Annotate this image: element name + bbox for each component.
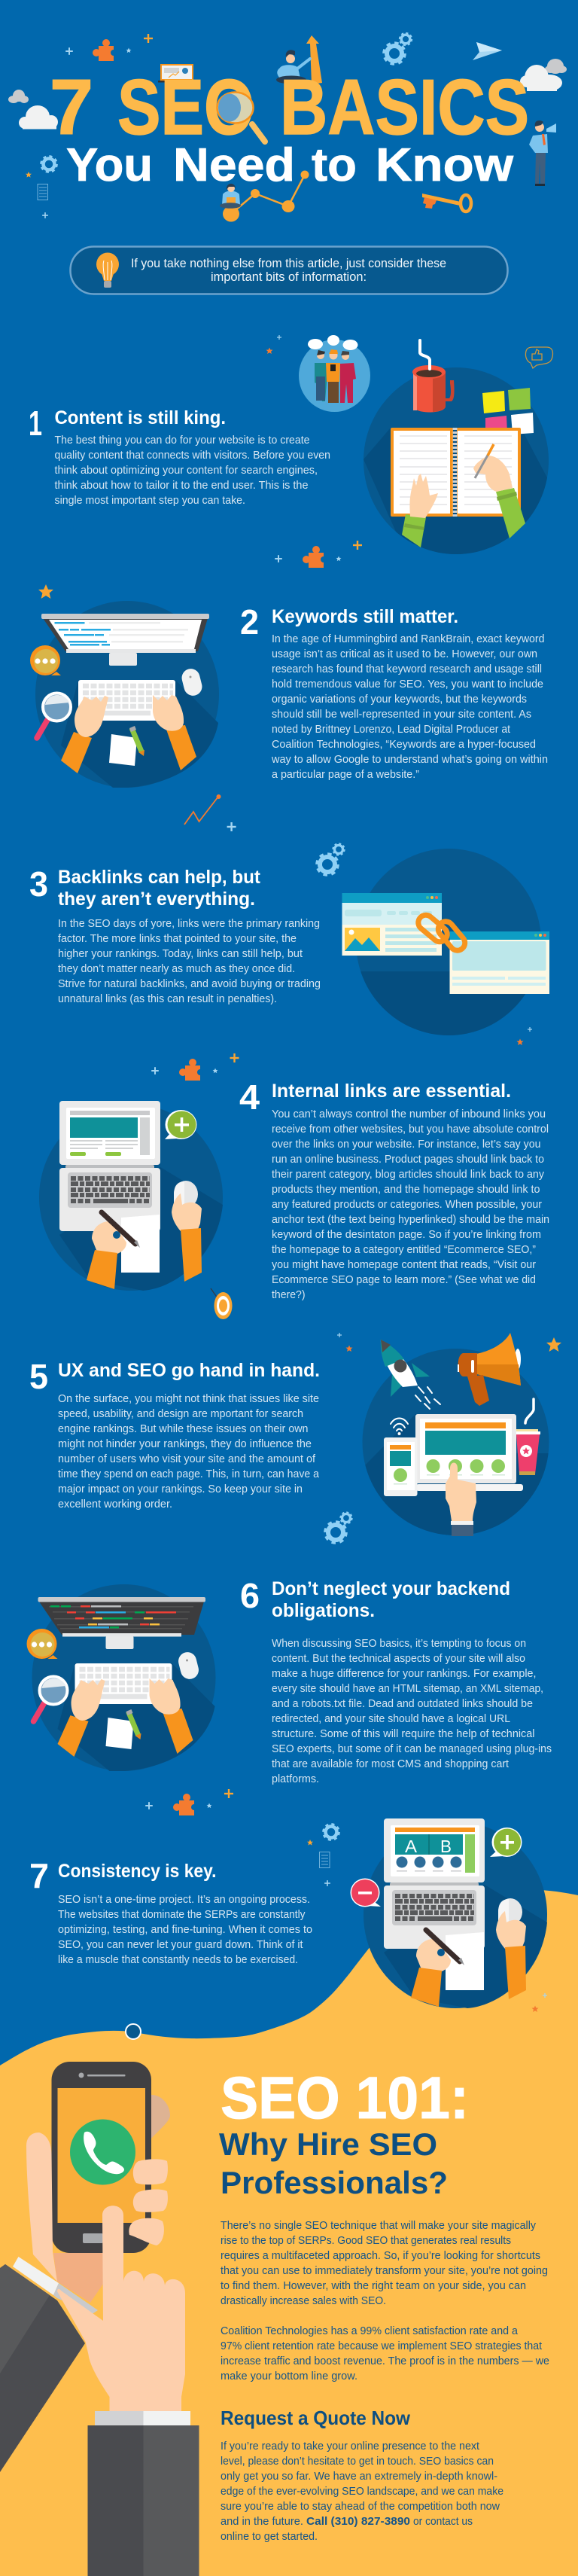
monitor	[415, 1414, 523, 1491]
title line 2	[66, 139, 514, 191]
subheading	[219, 2126, 448, 2200]
body 5: On the surface, you might not think that issues like site	[58, 1392, 319, 1405]
number 7: 7	[29, 1856, 49, 1895]
body 4: run an online business. Product pages should link back to	[272, 1153, 544, 1166]
icon: sparkles	[337, 1333, 561, 1352]
coffee cup	[516, 1399, 540, 1475]
body 3: they don’t matter nearly as much as they once did.	[58, 962, 295, 975]
heading 6	[272, 1578, 510, 1621]
body 1: single most important step you can take.	[54, 494, 245, 507]
heading 3: Backlinks can help, but	[58, 867, 261, 888]
thumb and wrist skin	[26, 2132, 57, 2282]
icon: plus lower left	[42, 212, 48, 218]
body 5: engine rankings. But while these issues on their own	[58, 1422, 309, 1435]
icon: clouds left	[8, 90, 58, 130]
body 6: and a robots.txt file. Dead and outdated links should be	[272, 1697, 533, 1710]
icon: plus and star	[531, 1993, 547, 2012]
illustration: desktop workstation	[30, 601, 219, 788]
writing hand	[473, 444, 525, 538]
shirt cuff	[95, 2411, 190, 2425]
body 4: their parent category, blog articles should link back to any	[272, 1168, 544, 1181]
heading 3: they aren’t everything.	[58, 889, 255, 910]
body: why hire paragraph 2: Coalition Technologies has a 99% client satisfaction rate and a	[221, 2324, 519, 2337]
body 4: You can’t always control the number of inbound links you	[272, 1108, 546, 1120]
body 2: organic variations of your keywords, but the keywords	[272, 693, 527, 706]
A/B screen content	[395, 1828, 475, 1873]
jacket sleeve	[87, 2425, 199, 2576]
heading 7: Consistency is key.	[58, 1861, 217, 1882]
illustration: group of people	[299, 335, 370, 412]
body: why hire paragraph 1: drastically increase sales with SEO.	[221, 2294, 386, 2307]
title line 2: Know	[376, 139, 514, 191]
body 6: that are available for most CMS and shopping cart	[272, 1757, 510, 1770]
icon group: puzzle and sparkles	[145, 1789, 233, 1815]
code monitor	[38, 1597, 205, 1637]
icon: magnifying glass on title	[217, 92, 265, 142]
body 4: the homepage to a category entitled “Ecommerce SEO,”	[272, 1243, 536, 1256]
section 1: content is still king	[29, 335, 552, 568]
icon: light plus	[65, 47, 73, 55]
body 6: make a huge difference for your rankings. For example,	[272, 1667, 536, 1680]
body: why hire paragraph 1: requires a multifaceted approach. So, if you’re looking for shortcuts	[221, 2249, 540, 2262]
body: why hire paragraph 2: make your bottom line grow.	[221, 2370, 357, 2382]
body: request a quote: online to get started.	[221, 2530, 318, 2543]
callout text: If you take nothing else from this article, just consider these	[131, 256, 446, 270]
body 6: content. But the technical aspects of your site will also	[272, 1652, 525, 1665]
icon: gears	[384, 33, 412, 64]
body: request a quote: Call (310) 827-3890	[306, 2515, 410, 2528]
section 3: backlinks	[29, 843, 549, 1045]
body 5: speed, usability, and design are mportant for search	[58, 1407, 303, 1420]
body 7: The websites that dominate the SERPs are constantly	[58, 1908, 306, 1921]
body 2	[271, 633, 548, 781]
title line 2: You	[66, 139, 153, 191]
body 1	[54, 434, 330, 507]
coffee mug	[412, 340, 455, 413]
palm and fingers	[57, 2206, 185, 2411]
body 4: keyword of the desintaton page. So if you’re linking from	[272, 1228, 541, 1241]
back of hand	[151, 2095, 170, 2139]
icon group: puzzle and sparkles	[151, 1053, 239, 1081]
body: why hire paragraph 1	[221, 2219, 548, 2307]
title line 2: Need	[173, 139, 295, 191]
body 2: research has found that keyword research and usage still	[272, 663, 542, 675]
heading 4: Internal links are essential.	[272, 1081, 511, 1102]
body 4: products they mention, and the homepage should link to	[272, 1183, 540, 1196]
subheading: Professionals?	[221, 2165, 448, 2200]
body: request a quote: If you’re ready to take your online presence to the next	[221, 2440, 480, 2453]
section 5: UX and SEO	[29, 1333, 561, 1543]
body 3	[58, 917, 321, 1005]
body 6: every site should have an HTML sitemap, an XML sitemap,	[272, 1682, 543, 1695]
jacket arm	[0, 2264, 85, 2472]
request a quote heading: Request a Quote Now	[221, 2407, 411, 2429]
phone	[384, 1437, 417, 1496]
body 4: over the links on your website. For instance, let’s say you	[272, 1138, 540, 1151]
callout text: important bits of information:	[211, 270, 367, 284]
body 2: way to allow Google to understand what’s going on within	[271, 753, 548, 766]
figure: sitting man with arrow	[276, 35, 322, 84]
icon: thumbs up bubble	[525, 347, 552, 368]
number 4: 4	[239, 1078, 260, 1117]
icon: plus bubble	[165, 1110, 197, 1139]
section 2: keywords still matter	[30, 584, 548, 831]
body 7: optimizing, testing, and fine-tuning. When it comes to	[58, 1923, 312, 1936]
body: why hire paragraph 2	[221, 2324, 549, 2382]
yellow wave background	[0, 1889, 578, 2576]
pointing hand	[446, 1462, 476, 1536]
body 1: think about how to tailor it to the end user. This is the	[54, 479, 309, 492]
body 3: Strive for natural backlinks, and avoid buying or trading	[58, 977, 321, 990]
heading 6: obligations.	[272, 1600, 375, 1621]
shirt cuff diagonal	[13, 2257, 98, 2314]
window one	[342, 893, 442, 956]
icon: laptop chart	[158, 65, 196, 83]
window two	[450, 931, 549, 994]
section 6: backend	[27, 1576, 552, 1815]
body: why hire paragraph 2: increase traffic and boost revenue. The proof is in the numbers — we	[221, 2355, 549, 2367]
body 1: think about optimizing your content for search engines,	[54, 464, 318, 477]
SEO 101 heading: SEO 101:	[221, 2064, 469, 2131]
figure: megaphone man	[529, 120, 556, 186]
title line 1	[50, 64, 529, 151]
body 4: you might have homepage content that reads, “Visit our	[272, 1258, 536, 1271]
body 3: factor. The more links that pointed to your site, the	[58, 932, 297, 945]
body 2: a particular page of a website.”	[272, 768, 419, 781]
body 6	[272, 1637, 552, 1785]
body 1: quality content that connects with visitors. Before you even	[54, 449, 330, 462]
body: request a quote: level, please don’t hesitate to get in touch. SEO basics can	[221, 2455, 494, 2468]
body 5: excellent working order.	[58, 1498, 172, 1511]
body 6: SEO experts, but some of it can be managed using plug-ins	[272, 1742, 552, 1755]
icon: plus bubble	[490, 1828, 522, 1857]
illustration: A/B testing laptop	[351, 1818, 547, 2008]
illustration: code workstation	[27, 1584, 215, 1771]
laptop screen content	[70, 1111, 150, 1156]
icon: light bulb	[96, 253, 119, 288]
dark palm under phone	[53, 2253, 103, 2303]
body: why hire paragraph 2: 97% client retention rate because we implement SEO strategies that	[221, 2340, 543, 2352]
icon group: puzzle and sparkles	[275, 541, 362, 568]
icon: plus and star	[516, 1027, 532, 1045]
body 2: hold tremendous value for SEO. Yes, you want to include	[272, 678, 543, 690]
body 5: number of users who visit your site and the amount of	[58, 1453, 316, 1465]
body 4: receive from other websites, but you have absolute control	[272, 1123, 549, 1136]
rocket	[381, 1340, 440, 1409]
icon: star	[38, 584, 53, 599]
phone	[51, 2062, 151, 2253]
body: request a quote: only get you so far. We have an extremely in-depth knowl-	[221, 2470, 497, 2483]
body 4	[272, 1108, 549, 1301]
icon: puzzle piece	[93, 39, 117, 61]
body 2: Coalition Technologies, “Keywords are a hyper-focused	[272, 738, 536, 751]
icon: gears	[317, 843, 345, 875]
heading 3	[58, 867, 261, 910]
wave marker dot	[126, 2024, 141, 2039]
icon: gears	[325, 1512, 352, 1543]
body 5: might not hinder your rankings, they do influence the	[58, 1437, 312, 1450]
body 7	[58, 1893, 312, 1966]
chart: growth line with sitting woman	[220, 170, 309, 221]
illustration: hand holding phone	[0, 2062, 199, 2576]
body 6: platforms.	[272, 1773, 319, 1785]
header illustration	[8, 33, 567, 221]
heading 2: Keywords still matter.	[272, 606, 458, 627]
icon: star left	[26, 172, 32, 178]
body 7: SEO isn’t a one-time project. It’s an ongoing process.	[58, 1893, 310, 1906]
notebook	[391, 428, 521, 517]
sticky notes	[482, 388, 534, 434]
body 7: like a muscle that constantly needs to be exercised.	[58, 1953, 298, 1966]
icon: phone handset	[84, 2132, 124, 2174]
body: request a quote: sure you’re able to stay ahead of the competition both now	[221, 2500, 500, 2513]
body 5: major impact on your rankings. So keep your site in	[58, 1483, 303, 1495]
body 5: time they spend on each page. This, in turn, can have a	[58, 1468, 320, 1480]
body: request a quote: or contact us	[413, 2515, 473, 2528]
icon: orange plus	[144, 34, 153, 43]
A/B screen content: A	[405, 1837, 418, 1856]
gripping fingers	[129, 2159, 168, 2245]
body 6: redirected, and your site should have a logical URL	[272, 1712, 510, 1725]
illustration: linked web pages	[342, 849, 549, 1039]
title line 1: SEO	[117, 64, 254, 151]
body 3: higher your rankings. Today, links can still help, but	[58, 947, 303, 960]
icon: target	[211, 1288, 232, 1319]
icon: gear left	[41, 157, 57, 172]
A/B screen content: B	[440, 1837, 452, 1856]
icon: rising line	[184, 794, 236, 831]
icon: document	[38, 184, 48, 200]
wifi icon	[391, 1419, 408, 1434]
body 6: structure. Some of this will require the help of technical	[272, 1727, 534, 1740]
body: why hire paragraph 1: rise to the top of SERPs. Good SEO that generates real results	[221, 2234, 511, 2247]
body 7: SEO, you can never let your guard down. Think of it	[58, 1938, 303, 1951]
body 4: Ecommerce SEO page to learn more.” (See what we did	[272, 1273, 536, 1286]
number 1: 1	[29, 404, 42, 443]
title line 2: to	[312, 139, 357, 191]
intro callout	[71, 247, 507, 294]
callout text	[131, 256, 446, 284]
body 2: usage isn’t as critical as it used to be. However, our own	[272, 648, 537, 660]
section 4: internal links	[39, 1053, 549, 1319]
body: request a quote	[221, 2440, 503, 2543]
icon: clouds right	[520, 59, 567, 91]
body 4: any featured products or categories. When possible, your	[272, 1198, 542, 1211]
illustration: laptop with links	[39, 1101, 223, 1291]
subheading: Why Hire SEO	[219, 2126, 437, 2162]
body: request a quote: and in the future.	[221, 2515, 303, 2528]
body: why hire paragraph 1: to find them. However, with the right team on your side, you can	[221, 2279, 526, 2292]
body 6: When discussing SEO basics, it’s tempting to focus on	[272, 1637, 526, 1650]
body 4: anchor text (the text being hyperlinked) should be the main	[272, 1213, 549, 1226]
body: why hire paragraph 1: that you can use to immediately transform your site, you’re not going	[221, 2264, 548, 2277]
icon: key	[422, 194, 471, 212]
heading 5: UX and SEO go hand in hand.	[58, 1360, 320, 1381]
title line 1: BASICS	[280, 64, 529, 151]
icon: light star	[126, 48, 131, 53]
icon: star and plus	[266, 335, 281, 354]
body 5	[58, 1392, 320, 1511]
number 3: 3	[29, 864, 48, 904]
number 2: 2	[240, 602, 259, 642]
illustration: notebook on desk	[364, 340, 549, 555]
body 2: noted by Brittney Lorenzo, Lead Digital Producer at	[272, 723, 511, 736]
illustration: responsive devices	[362, 1333, 549, 1536]
megaphone	[458, 1333, 521, 1406]
icon: paper plane	[473, 42, 502, 60]
number 5: 5	[29, 1357, 48, 1396]
icon: minus bubble	[351, 1878, 381, 1907]
body: request a quote: edge of the ever-evolving SEO landscape, and we can make	[221, 2485, 503, 2498]
monitor	[41, 614, 209, 653]
resting hand	[402, 474, 438, 547]
body 2: In the age of Hummingbird and RankBrain, exact keyword	[272, 633, 545, 645]
title	[50, 64, 529, 191]
icon group: gear, star, document, plus	[307, 1824, 339, 1886]
body 3: In the SEO days of yore, links were the primary ranking	[58, 917, 320, 930]
body 3: unnatural links (as this can result in penalties).	[58, 992, 277, 1005]
heading 6: Don’t neglect your backend	[272, 1578, 510, 1599]
chain link	[415, 912, 468, 953]
body 1: The best thing you can do for your website is to create	[54, 434, 310, 447]
body 2: should still be well-represented in your site content. As	[272, 708, 531, 721]
section 7: consistency	[29, 1818, 547, 2012]
number 6: 6	[240, 1576, 260, 1615]
body 4: there?)	[272, 1288, 306, 1301]
heading 1: Content is still king.	[54, 407, 226, 428]
body: why hire paragraph 1: There’s no single SEO technique that will make your site magically	[221, 2219, 536, 2232]
title line 1: 7	[50, 64, 93, 151]
